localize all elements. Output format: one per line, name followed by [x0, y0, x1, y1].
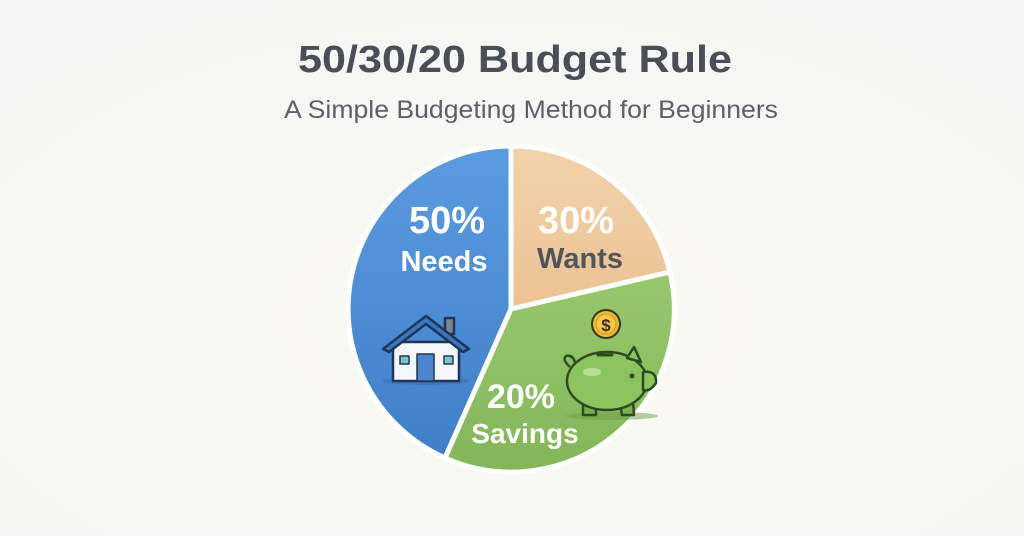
label: 50% needs: [400, 200, 488, 278]
subtitle: A Simple Budgeting Method for Beginners: [284, 96, 778, 124]
label: 50% needs: 50%: [409, 200, 485, 242]
icon: coin: [592, 310, 620, 338]
icon: piggy bank: [565, 347, 658, 420]
pie chart: [348, 146, 674, 472]
title: 50/30/20 Budget Rule: [298, 39, 732, 81]
label: 30% wants: Wants: [537, 243, 623, 275]
label: 30% wants: 30%: [538, 200, 614, 242]
slice: needs: [348, 146, 511, 458]
label: 20% savings: [471, 378, 579, 449]
slice: wants: [511, 146, 670, 309]
label: 20% savings: 20%: [487, 378, 555, 416]
label: 50% needs: Needs: [400, 246, 488, 278]
label: 20% savings: Savings: [471, 418, 579, 449]
icon: house: [382, 316, 470, 385]
slice: savings: [445, 272, 674, 472]
label: 30% wants: [537, 200, 623, 275]
icon: coin: $: [601, 316, 611, 335]
